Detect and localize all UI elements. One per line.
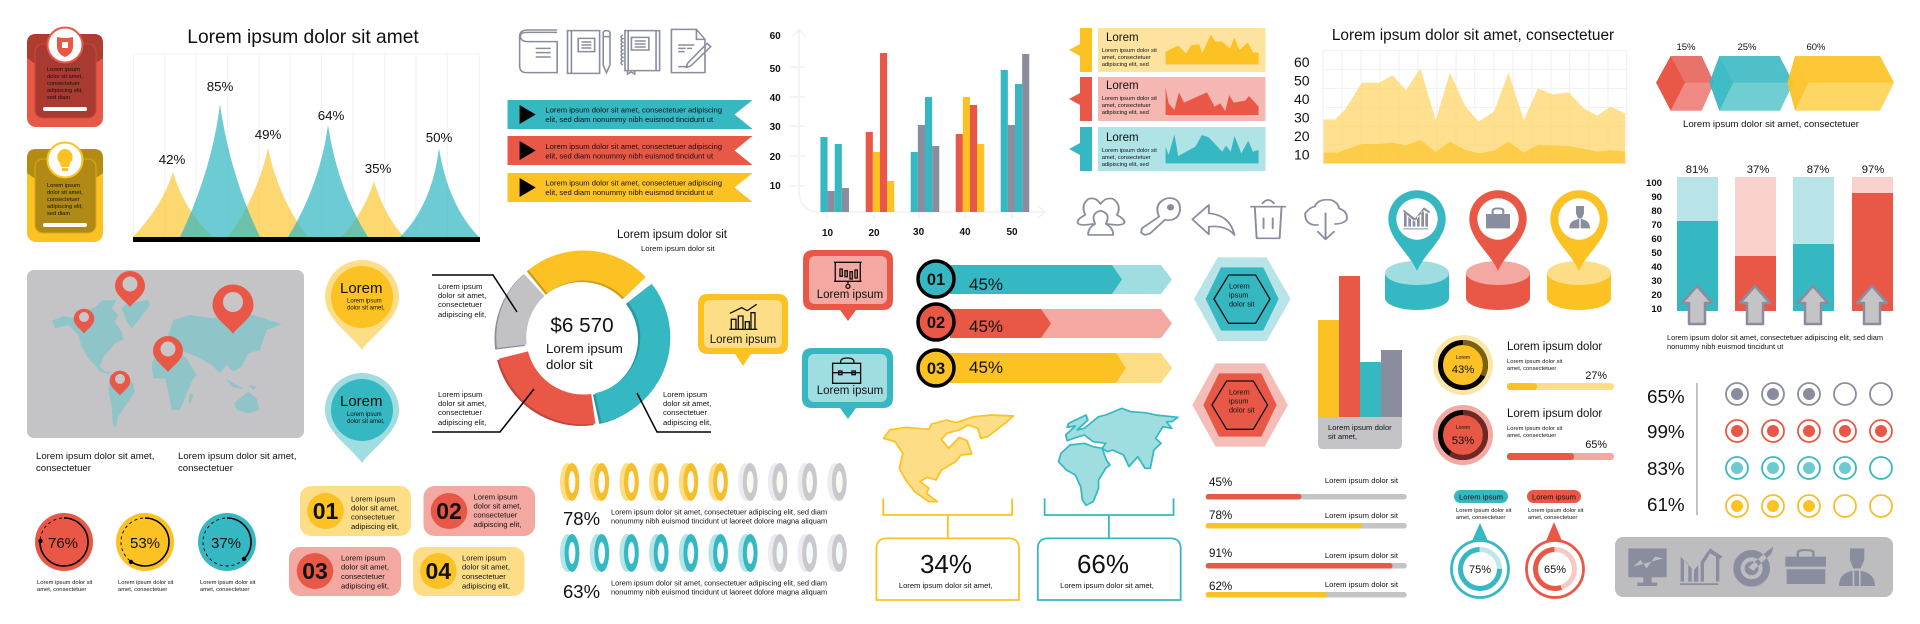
icon: briefcase [1785,549,1826,584]
icons: map pins [74,271,254,395]
progress arrow 02 [918,304,1172,340]
callout: yellow teardrop [325,260,399,350]
chart: segmented donut: dolor sit [546,357,593,372]
panel: yellow mini area card: adipiscing elit, sed [1102,62,1149,68]
panel: yellow mini area card [1069,28,1266,72]
chart: stacked percent columns with arrows: 90 [1651,192,1662,203]
marker gauge: red 65 percent: Lorem ipsum dolor sit [1528,508,1584,514]
chart: grouped vertical bars: 20 [868,228,880,239]
callout: yellow teardrop: dolor sit amet, [347,306,385,312]
pin on yellow cylinder [1547,190,1611,310]
text: yellow card: Lorem ipsum [47,183,80,189]
icons: users, key, reply, trash, cloud [1078,198,1347,239]
text: red card: sed diam [47,95,70,101]
panel: teal mini area card: amet, consectetuer [1102,155,1151,161]
chart: percentage peaks: 85% [207,79,233,94]
panel: red mini area card: Lorem [1106,80,1139,92]
callout: yellow teardrop: Lorem ipsum [347,298,382,304]
panel: teal mini area card: Lorem [1106,132,1139,144]
panel: yellow idea card [27,142,103,242]
chart: horizontal progress bars [1206,476,1407,598]
stat block: 65 percent: amet, consectetuer [1507,433,1556,439]
chart: grouped vertical bars: 50 [770,64,781,75]
leader lines and donut labels: dolor sit amet, [438,399,486,408]
banner: red ribbon [508,136,752,165]
icon: monitor [1628,548,1667,586]
pin on teal cylinder [1385,190,1449,310]
chart: horizontal progress bars: 91% [1209,547,1232,560]
chart: grouped vertical bars: 10 [822,228,833,239]
leader lines and donut labels: Lorem ipsum [438,390,482,399]
text: red card: adipiscing elit, [47,88,83,94]
map callout: North America 34 percent: 34% [920,549,972,579]
chart: stacked percent columns with arrows: 100 [1646,178,1662,189]
chart: layered yellow area: 30 [1294,110,1310,126]
stat block: 65 percent: Lorem ipsum dolor [1507,408,1602,420]
chart: percentage peaks: 35% [365,161,391,176]
text: red card: dolor sit amet, [47,74,83,80]
ring row: yellow 78 percent [560,463,847,529]
numbered chip 01: 01 [313,498,338,524]
numbered chip 02: dolor sit amet, [474,502,522,510]
stat block: 65 percent: Lorem ipsum dolor sit [1507,426,1563,432]
chart: red mini area [1166,87,1259,115]
ring row: yellow 78 percent: Lorem ipsum dolor sit amet, consectetuer adipiscing elit, sed diam [611,508,827,516]
icon: shield with lock [57,37,73,57]
banner: teal ribbon: elit, sed diam nonummy nibh euismod tincidunt ut [545,115,714,124]
chart: stacked percent columns with arrows: 81% [1686,164,1708,176]
callout: red presentation box [803,250,893,321]
chart: grouped vertical bars: 40 [770,93,781,104]
progress arrow 03 [918,350,1172,386]
chart: stacked percent columns with arrows: 60 [1651,234,1662,245]
callout: yellow teardrop: Lorem [340,280,383,297]
chart: grouped vertical bars: 10 [770,181,781,192]
dot rating grid: 61% [1647,494,1685,515]
text: red card: Lorem ipsum [47,67,80,73]
leader lines and donut labels: consectetuer [663,408,707,417]
callout: red hexagon: dolor sit [1229,406,1255,414]
numbered chip 02 [424,486,535,536]
leader lines and donut labels: adipiscing elit, [438,418,486,427]
chart: grouped vertical bars: 20 [770,152,781,163]
icon: bar chart in pin [1403,207,1430,229]
gauge: 53 percent: Lorem ipsum dolor sit [118,580,174,586]
gauge: 76 percent [35,513,93,593]
banner: red ribbon: elit, sed diam nonummy nibh euismod tincidunt ut [545,152,714,160]
world landmass [52,300,282,428]
ring row: teal 63 percent: nonummy nibh euismod tincidunt ut laoreet dolore magna aliquam [611,588,827,596]
map callout: North America 34 percent [876,415,1019,600]
numbered chip 04: dolor sit amet, [462,562,510,572]
banner: yellow ribbon [508,173,752,202]
chart: layered yellow area: 40 [1294,91,1310,107]
chart: percentage peaks: 64% [318,108,344,123]
numbered chip 02: 02 [436,498,462,524]
gauge: 76 percent: amet, consectetuer [37,587,86,593]
panel: red mini area card: amet, consectetuer [1102,103,1151,109]
chart: four bar card: Lorem ipsum dolor [1328,423,1392,432]
numbered chip 04: 04 [426,558,451,584]
chart: segmented donut [480,236,685,440]
gauge: 76 percent: 76% [48,535,78,552]
banner: yellow ribbon: elit, sed diam nonummy nibh euismod tincidunt ut [545,188,714,197]
map callout: Eurasia and Africa 66 percent: Lorem ipsum dolor sit amet, [1060,581,1154,590]
gauge: 53 percent [116,513,174,593]
heading: peak chart title: Lorem ipsum dolor sit amet [187,27,419,48]
progress arrow 02: 02 [927,314,945,332]
callout: teal teardrop: Lorem ipsum [347,412,382,418]
callout: yellow chart box [698,294,788,366]
chart: yellow mini area [1166,34,1259,64]
dot rating grid: 83% [1647,458,1685,479]
numbered chip 03: Lorem ipsum [341,554,385,562]
banner: teal ribbon [508,100,752,129]
map callout: Eurasia and Africa 66 percent [1038,408,1181,600]
panel: grey business icons [1615,537,1893,597]
stat block: 65 percent: 65% [1585,439,1607,451]
chart: grouped vertical bars: 30 [913,227,925,238]
radial progress: 43 percent: Lorem [1456,355,1470,361]
numbered chip 02: consectetuer [474,510,518,520]
hex flow: 15 25 60 percent: 60% [1806,42,1826,53]
panel: red mini area card [1069,77,1266,121]
radial progress: 43 percent [1433,335,1493,395]
chart: grouped vertical bars: 30 [770,122,781,133]
stat block: 27 percent: Lorem ipsum dolor sit [1507,359,1563,365]
ring row: teal 63 percent: 63% [563,581,600,602]
radial progress: 53 percent: 53% [1452,435,1474,447]
marker gauge: teal 75 percent: Lorem ipsum [1459,492,1503,502]
chart: stacked percent columns with arrows: 30 [1651,276,1662,287]
ring row: yellow 78 percent: 78% [563,508,600,529]
chart: percentage peaks: 42% [159,152,185,167]
chart: layered yellow area [1294,51,1627,163]
callout: teal hexagon [1194,257,1291,341]
heading: donut title: Lorem ipsum dolor sit [617,229,728,241]
ring row: yellow 78 percent: nonummy nibh euismod tincidunt ut laoreet dolore magna aliquam [611,516,827,526]
dot rating grid [1647,383,1892,517]
chart: horizontal progress bars: 62% [1209,580,1232,593]
callout: teal teardrop [325,373,399,463]
banner: red ribbon: Lorem ipsum dolor sit amet, consectetuer adipiscing [545,142,722,151]
chart: stacked percent columns with arrows: 20 [1651,290,1662,301]
numbered chip 03: consectetuer [341,572,385,581]
numbered chip 03: dolor sit amet, [341,562,389,572]
icon: presentation board [834,262,862,288]
numbered chip 03: 03 [302,558,328,584]
gauge: 37 percent: Lorem ipsum dolor sit [200,580,256,586]
hex flow: 15 25 60 percent: Lorem ipsum dolor sit amet, consectetuer [1683,119,1860,130]
leader lines and donut labels: consectetuer [438,408,482,417]
callout: red hexagon: Lorem [1229,388,1250,396]
leader lines and donut labels: adipiscing elit, [663,418,711,427]
numbered chip 02: Lorem ipsum [474,492,518,502]
marker gauge: teal 75 percent [1452,490,1512,598]
gauge: 53 percent: 53% [130,535,160,552]
stat block: 27 percent: Lorem ipsum dolor [1507,341,1602,353]
dot rating grid: 65% [1647,386,1685,407]
callout: teal briefcase box: Lorem ipsum [817,385,883,397]
leader lines and donut labels: adipiscing elit, [438,310,486,319]
stat block: 27 percent: amet, consectetuer [1507,366,1556,372]
marker gauge: teal 75 percent: amet, consectetuer [1456,515,1505,521]
chart: layered yellow area: 10 [1294,146,1310,162]
numbered chip 01: consectetuer [351,512,395,522]
text: map captions: Lorem ipsum dolor sit amet, [178,451,296,462]
callout: teal teardrop: Lorem [340,393,383,410]
numbered chip 01: Lorem ipsum [351,494,395,504]
chart: grouped vertical bars: 50 [1006,227,1018,238]
callout: teal hexagon: Lorem [1229,282,1250,290]
chart: horizontal progress bars: Lorem ipsum dolor sit [1325,476,1399,485]
text: yellow card: consectetuer [47,197,80,203]
banner: teal ribbon: Lorem ipsum dolor sit amet, consectetuer adipiscing [545,106,722,114]
heading: donut title [617,229,728,253]
stat block: 27 percent [1507,341,1614,390]
chart: layered yellow area: 60 [1294,54,1310,70]
numbered chip 04: consectetuer [462,572,506,581]
text: map captions: consectetuer [178,463,234,474]
panel: yellow mini area card: Lorem [1106,32,1139,44]
chart: horizontal progress bars: 45% [1209,476,1232,489]
chart: horizontal progress bars: Lorem ipsum dolor sit [1325,511,1399,520]
gauge: 76 percent: Lorem ipsum dolor sit [37,580,93,586]
icon: briefcase in pin [1486,207,1510,228]
marker gauge: teal 75 percent: Lorem ipsum dolor sit [1456,508,1512,514]
leader lines and donut labels: Lorem ipsum [663,390,707,399]
numbered chip 01: adipiscing elit, [351,522,399,531]
marker gauge: red 65 percent: amet, consectetuer [1528,515,1577,521]
chart: horizontal progress bars: Lorem ipsum dolor sit [1325,580,1399,589]
icon: bars with trend line [729,304,757,329]
chart: stacked percent columns with arrows: 37% [1747,164,1769,176]
chart: segmented donut: $6 570 [550,314,614,337]
marker gauge: teal 75 percent: 75% [1469,564,1491,576]
dot rating grid: 99% [1647,421,1685,442]
banner: yellow ribbon: Lorem ipsum dolor sit amet, consectetuer adipiscing [545,178,722,188]
panel: red mini area card: Lorem ipsum dolor sit [1102,96,1157,102]
icon: briefcase outline [833,358,861,383]
chart: stacked percent columns with arrows: 50 [1651,248,1662,259]
gauge: 37 percent [198,513,256,593]
marker gauge: red 65 percent: Lorem ipsum [1532,492,1576,502]
progress arrow 01 [918,261,1172,297]
numbered chip 02: adipiscing elit, [474,520,522,529]
text: red card: consectetuer [47,81,80,87]
chart: layered yellow area: 20 [1294,128,1310,144]
map callout: North America 34 percent: Lorem ipsum dolor sit amet, [899,581,993,590]
callout: red hexagon: ipsum [1229,396,1248,406]
callout: teal hexagon: ipsum [1229,290,1248,300]
callout: red hexagon [1192,363,1288,447]
gauge: 37 percent: 37% [211,535,241,552]
callout: red presentation box: Lorem ipsum [817,289,883,301]
leader lines and donut labels: dolor sit amet, [663,399,711,408]
gauge: 37 percent: amet, consectetuer [200,587,249,593]
marker gauge: red 65 percent: 65% [1544,564,1566,576]
chart: four bar card [1318,276,1402,449]
progress arrow 01: 01 [927,271,945,289]
numbered chip 01 [300,486,411,536]
panel: red mini area card: adipiscing elit, sed [1102,110,1149,116]
text: map captions: consectetuer [36,463,92,474]
gauge: 53 percent: amet, consectetuer [118,587,167,593]
progress arrow 03: 45% [969,358,1003,377]
radial progress: 53 percent: Lorem [1456,425,1470,431]
panel: teal mini area card: Lorem ipsum dolor sit [1102,148,1157,154]
heading: donut title: Lorem ipsum dolor sit [641,244,715,253]
chart: stacked percent columns with arrows: 70 [1651,220,1662,231]
chart: percentage peaks [133,54,480,242]
hex flow: 15 25 60 percent [1656,42,1894,130]
panel: yellow mini area card: amet, consectetuer [1102,55,1151,61]
icon: light bulb [57,149,73,171]
hex flow: 15 25 60 percent: 25% [1737,42,1757,53]
map: world map panel [27,270,304,438]
chart: grouped vertical bars [770,30,1045,239]
pin on red cylinder [1466,190,1530,310]
callout: teal teardrop: dolor sit amet, [347,419,385,425]
progress arrow 01: 45% [969,275,1003,294]
panel: teal mini area card: adipiscing elit, sed [1102,162,1149,168]
text: yellow card: dolor sit amet, [47,190,83,196]
leader lines and donut labels: Lorem ipsum [438,282,482,291]
chart: stacked percent columns with arrows: 10 [1651,304,1662,315]
heading: area chart title: Lorem ipsum dolor sit amet, consectetuer [1332,27,1614,44]
chart: horizontal progress bars: 78% [1209,509,1232,522]
panel: yellow mini area card: Lorem ipsum dolor sit [1102,48,1157,54]
panel: teal mini area card [1069,127,1266,171]
chart: grouped vertical bars: 60 [770,31,781,42]
arrows: up arrows [1682,286,1887,324]
hex flow: 15 25 60 percent: 15% [1676,42,1696,53]
chart: four bar card: sit amet, [1328,432,1357,441]
numbered chip 04: adipiscing elit, [462,582,510,590]
chart: stacked percent columns with arrows: 40 [1651,262,1662,273]
chart: layered yellow area: 50 [1294,72,1310,88]
text: yellow card: sed diam [47,211,70,217]
ring row: teal 63 percent [560,534,847,602]
icon: person in pin [1569,206,1590,228]
chart: percentage peaks: 49% [255,127,281,142]
leader lines and donut labels: consectetuer [438,300,482,309]
chart: stacked percent columns with arrows [1646,164,1893,351]
text: yellow card: adipiscing elit, [47,204,83,210]
chart: stacked percent columns with arrows: nonummy nibh euismod tincidunt ut [1667,342,1783,351]
numbered chip 04: Lorem ipsum [462,554,506,562]
callout: teal hexagon: dolor sit [1229,300,1255,308]
numbered chip 04 [413,547,524,596]
leader lines and donut labels: dolor sit amet, [438,291,486,300]
chart: stacked percent columns with arrows: 80 [1651,206,1662,217]
radial progress: 43 percent: 43% [1452,364,1474,376]
chart: grouped vertical bars: 40 [959,227,971,238]
callout: teal briefcase box [802,348,893,419]
radial progress: 53 percent [1433,405,1493,465]
stat block: 65 percent [1507,408,1614,460]
numbered chip 01: dolor sit amet, [351,504,399,512]
progress arrow 02: 45% [969,317,1003,336]
panel: red security card [27,28,103,127]
icon: bar chart with arrow [1680,548,1723,585]
numbered chip 03 [289,547,401,596]
chart: stacked percent columns with arrows: Lorem ipsum dolor sit amet, consectetuer adipiscing elit, sed diam [1667,333,1883,342]
text: map captions: Lorem ipsum dolor sit amet, [36,451,154,462]
chart: stacked percent columns with arrows: 97% [1862,164,1884,176]
stat block: 27 percent: 27% [1585,370,1607,382]
map callout: Eurasia and Africa 66 percent: 66% [1077,549,1129,579]
progress arrow 03: 03 [927,360,945,378]
numbered chip 03: adipiscing elit, [341,582,389,590]
marker gauge: red 65 percent [1526,490,1584,598]
chart: stacked percent columns with arrows: 87% [1807,164,1829,176]
icons: books and documents [520,29,711,74]
icon: target [1733,547,1773,587]
callout: yellow chart box: Lorem ipsum [710,334,776,346]
chart: teal mini area [1166,134,1259,163]
chart: segmented donut: Lorem ipsum [546,341,623,356]
chart: horizontal progress bars: Lorem ipsum dolor sit [1325,551,1399,560]
icon: businessman [1839,548,1875,586]
leader lines and donut labels [432,275,711,432]
ring row: teal 63 percent: Lorem ipsum dolor sit amet, consectetuer adipiscing elit, sed diam [611,578,827,588]
chart: percentage peaks: 50% [426,130,452,145]
